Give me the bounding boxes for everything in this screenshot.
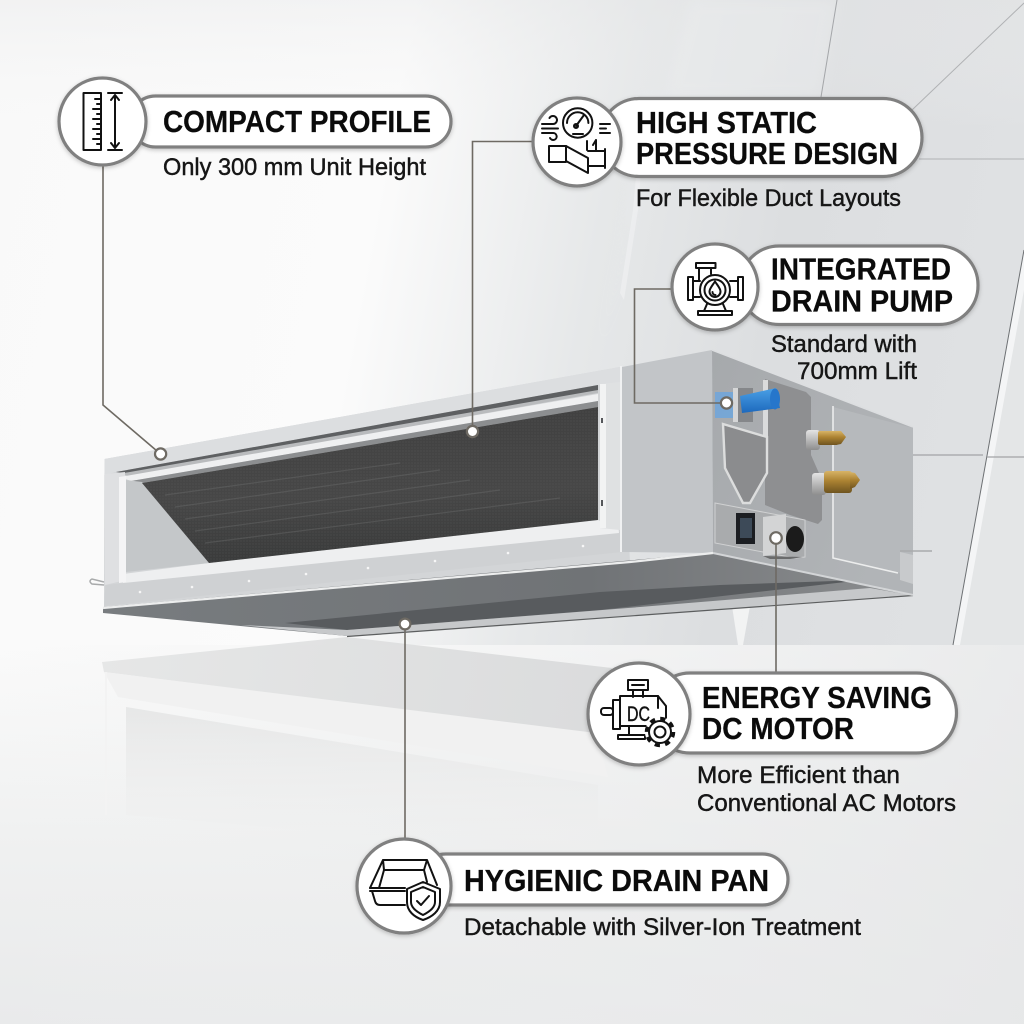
heading: drain pump: DRAIN PUMP <box>771 284 953 318</box>
textured end panel <box>622 350 713 553</box>
icon: drain pan with shield <box>357 839 451 933</box>
callout: high static pressure <box>533 98 922 212</box>
electrical box <box>715 503 805 559</box>
text: detachable with silver-ion treatment: Detachable with Silver-Ion Treatment <box>464 914 861 941</box>
callout: compact profile <box>59 78 451 181</box>
mounting clip right <box>900 551 932 584</box>
text: conventional AC motors: Conventional AC Motors <box>697 790 956 817</box>
pill: compact profile <box>130 96 451 147</box>
heading: energy saving: ENERGY SAVING <box>702 680 932 715</box>
callout: energy saving DC motor <box>588 663 956 817</box>
heading: compact profile: COMPACT PROFILE <box>163 104 431 139</box>
icon label: DC: DC <box>627 703 650 726</box>
control box cover <box>723 424 767 503</box>
connector: drain pan <box>400 619 410 838</box>
lower frame panel with rivets <box>104 520 622 606</box>
heading: hygienic drain pan: HYGIENIC DRAIN PAN <box>464 863 769 898</box>
connector: DC motor <box>770 532 782 672</box>
connector: drain pump <box>634 289 732 409</box>
icon: pump with water drop <box>672 244 758 330</box>
refrigerant brass fittings <box>806 430 860 495</box>
floor reflection of the unit <box>102 637 612 855</box>
bottom drain pan <box>103 553 913 636</box>
heading line two: high static pressure: PRESSURE DESIGN <box>636 136 898 171</box>
heading: high static pressure: HIGH STATIC <box>636 105 817 140</box>
pill: high static pressure <box>600 98 922 176</box>
side bracket plate <box>763 379 822 524</box>
icon: gauge, air flow and duct <box>533 98 621 186</box>
text: 700mm lift: 700mm Lift <box>797 358 917 385</box>
pill: integrated drain pump <box>740 246 978 324</box>
text: flexible duct layouts: For Flexible Duct Layouts <box>636 185 901 212</box>
heading: DC motor: DC MOTOR <box>702 711 854 746</box>
air intake opening <box>104 366 621 585</box>
heading: integrated: INTEGRATED <box>771 252 951 286</box>
side panel <box>712 350 913 595</box>
pill: hygienic drain pan <box>420 854 788 905</box>
front face <box>104 367 630 607</box>
callout: hygienic drain pan <box>357 839 861 941</box>
text: compact profile detail: Only 300 mm Unit Height <box>163 154 426 181</box>
icon: ruler and height arrow <box>59 78 146 165</box>
connector: high static pressure <box>467 142 532 437</box>
text: standard with: Standard with <box>771 331 917 358</box>
callout: integrated drain pump <box>672 244 978 385</box>
mounting clip left <box>90 579 104 585</box>
connector: compact profile <box>103 166 166 460</box>
blue drain pipe <box>715 388 780 422</box>
icon: DC motor with gear <box>588 663 690 765</box>
pill: energy saving DC motor <box>650 673 956 753</box>
air conditioning ducted unit <box>90 350 932 636</box>
text: more efficient than: More Efficient than <box>697 762 900 789</box>
